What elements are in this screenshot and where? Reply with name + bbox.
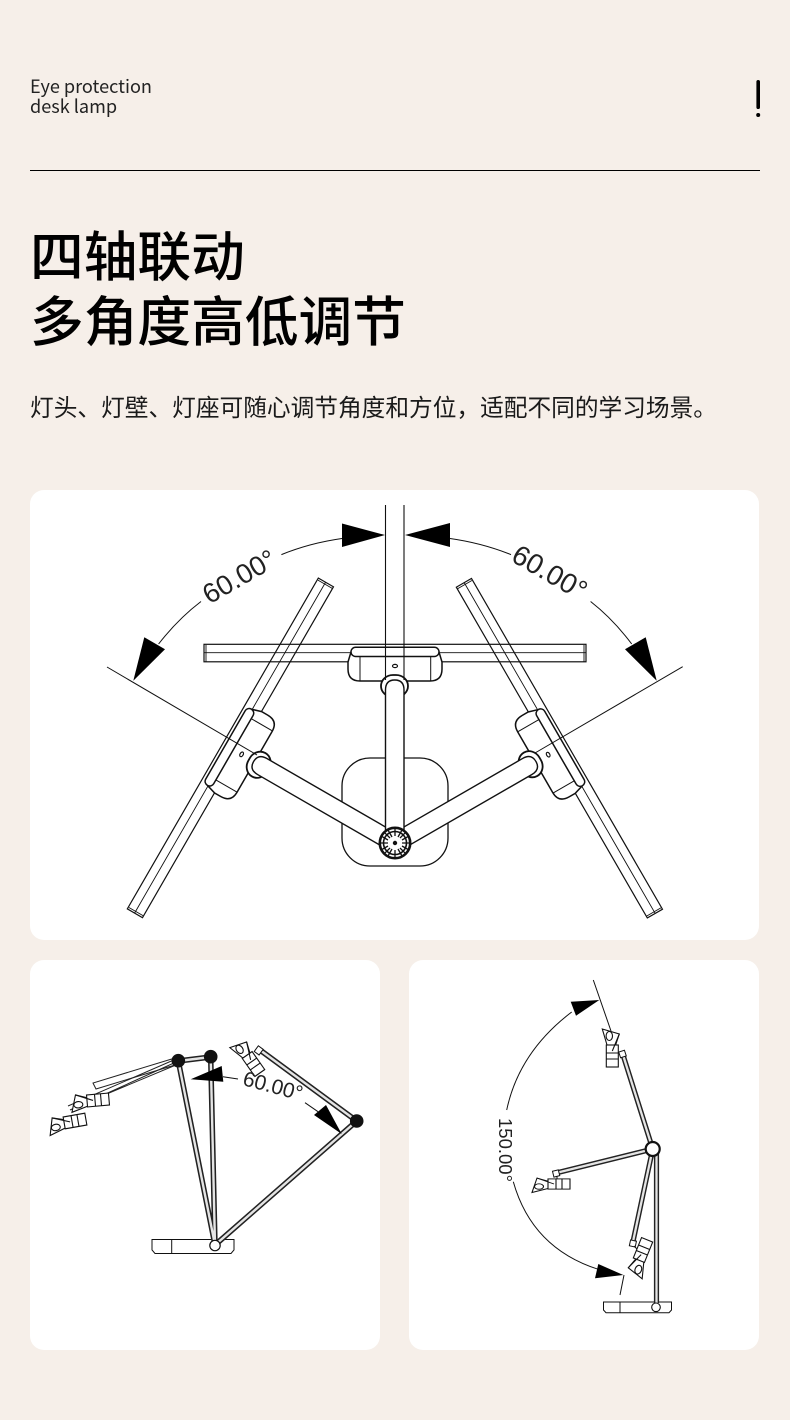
arm end cap <box>254 1046 263 1055</box>
base <box>152 1240 234 1254</box>
extension lines <box>593 980 624 1295</box>
arrowheads <box>191 1066 342 1134</box>
brand label <box>30 73 152 119</box>
brand label: Eye protection <box>30 73 152 99</box>
lamp head: bottom <box>626 1237 656 1279</box>
hub joint <box>646 1142 660 1156</box>
lamp upright centre <box>204 644 586 843</box>
arms light core <box>556 1054 656 1303</box>
panel: head tilt side view <box>409 960 759 1350</box>
centre extension lines <box>386 505 404 680</box>
lamp head: left upper <box>70 1092 110 1112</box>
dimension leaders <box>223 1077 318 1112</box>
label: 150 degrees: 150.00° <box>495 1118 516 1182</box>
icon: exclamation mark <box>756 80 760 117</box>
arm end caps and stems <box>552 1050 637 1249</box>
lamp head: left lower <box>47 1112 88 1136</box>
base <box>604 1302 672 1313</box>
left forearms <box>68 1057 178 1110</box>
hub joint <box>380 828 410 858</box>
lamp base plate <box>342 758 448 866</box>
label: left 60 degrees: 60.00° <box>197 543 282 610</box>
panel: top view rotation diagram <box>30 490 759 940</box>
dimension arcs <box>159 538 632 644</box>
arrowheads <box>571 1000 623 1278</box>
arms dark <box>178 1050 357 1245</box>
panel: arm tilt side view <box>30 960 380 1350</box>
lamp rotated right <box>299 578 662 1009</box>
title: 四轴联动 <box>30 215 245 292</box>
lamp head: top <box>602 1029 619 1067</box>
subtitle text: 灯头、灯壁、灯座可随心调节角度和方位，适配不同的学习场景。 <box>30 389 717 423</box>
title: 多角度高低调节 <box>30 280 406 357</box>
base joint <box>652 1303 660 1312</box>
lamp head: upper right <box>230 1038 266 1079</box>
dimension arcs <box>507 1012 598 1269</box>
arms dark <box>556 1054 656 1303</box>
lamp head: middle <box>532 1178 570 1192</box>
label: 60 degrees: 60.00° <box>240 1067 305 1105</box>
arms light core <box>178 1050 357 1245</box>
arrowheads <box>133 523 657 681</box>
angle extension lines <box>107 667 683 755</box>
joints <box>172 1050 364 1128</box>
base hub <box>210 1240 220 1251</box>
title <box>30 215 406 357</box>
brand label: desk lamp <box>30 93 117 119</box>
lamp rotated left <box>127 578 490 1008</box>
label: right 60 degrees: 60.00° <box>507 539 593 606</box>
